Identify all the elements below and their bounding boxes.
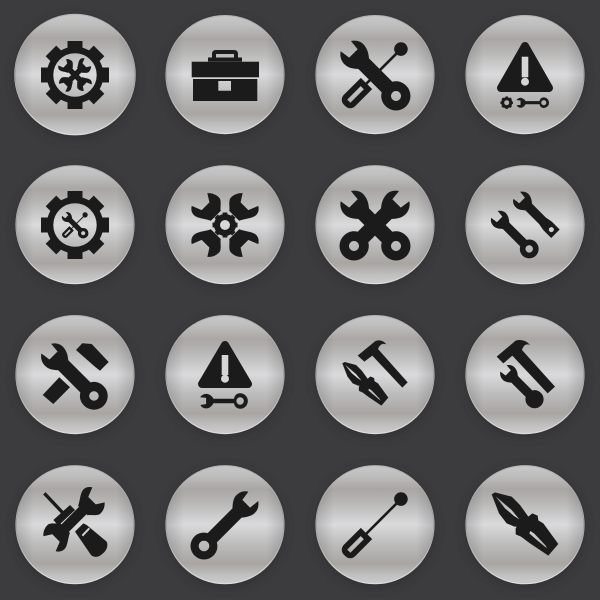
toolbox body	[193, 79, 257, 101]
icon: wrench and hammer	[15, 316, 135, 438]
icon: single wrench	[165, 466, 285, 588]
metal disc	[315, 16, 435, 138]
small tools	[60, 210, 91, 241]
metal disc	[15, 316, 135, 438]
metal disc	[465, 166, 585, 288]
icon: warning with gear and wrench	[465, 16, 585, 138]
flat-ended wrench	[510, 189, 562, 240]
warning triangle	[501, 46, 549, 88]
exclamation mark	[521, 57, 529, 86]
icon: gear with crossed wrenches	[14, 14, 136, 139]
metal disc	[465, 466, 585, 588]
wrench	[185, 487, 263, 565]
warning triangle	[202, 345, 248, 384]
metal disc	[14, 14, 136, 139]
icon: screwdriver	[315, 466, 435, 588]
wrench with solid end	[497, 362, 547, 412]
metal disc	[15, 166, 135, 288]
exclamation mark	[221, 355, 229, 383]
small gear	[500, 96, 513, 109]
icon: toolbox	[165, 16, 285, 138]
wrenches	[333, 186, 417, 267]
metal disc	[315, 166, 435, 288]
gear	[41, 191, 109, 259]
icon: two parallel wrenches	[465, 166, 585, 288]
gear	[41, 41, 109, 109]
metal disc	[165, 166, 285, 288]
wrench heads	[188, 188, 262, 262]
screwdriver	[44, 493, 107, 557]
metal disc	[15, 466, 135, 588]
icon: warning with wrench	[165, 316, 285, 438]
double open wrench	[39, 484, 109, 555]
metal disc	[315, 466, 435, 588]
wrench	[200, 393, 248, 409]
screwdriver	[339, 39, 411, 111]
metal disc	[165, 16, 285, 138]
screwdriver	[339, 489, 411, 561]
hammer	[497, 340, 555, 393]
toolbox handle	[208, 52, 242, 60]
metal disc	[165, 466, 285, 588]
metal disc	[465, 316, 585, 438]
wrench	[37, 339, 113, 415]
wrench	[336, 36, 417, 117]
hammer	[358, 340, 408, 388]
icon: four wrenches around gear	[165, 166, 285, 288]
toolbox lid	[192, 62, 259, 77]
pliers	[492, 492, 558, 556]
icon: hammer and wrench	[465, 316, 585, 438]
icon: crossed wrenches	[315, 166, 435, 288]
hammer	[43, 343, 109, 404]
icon: pliers	[465, 466, 585, 588]
center gear	[212, 212, 238, 238]
icon: pliers and hammer	[315, 316, 435, 438]
small wrench	[516, 97, 549, 108]
metal disc	[165, 316, 285, 438]
icon: wrench and screwdriver	[315, 16, 435, 138]
metal disc	[465, 16, 585, 138]
icon: gear with wrench and screwdriver	[15, 166, 135, 288]
ring wrench	[488, 207, 543, 262]
crossed wrenches	[57, 57, 93, 93]
pliers	[342, 362, 388, 406]
metal disc	[315, 316, 435, 438]
icon: wrench crossed with screwdriver	[15, 466, 135, 588]
